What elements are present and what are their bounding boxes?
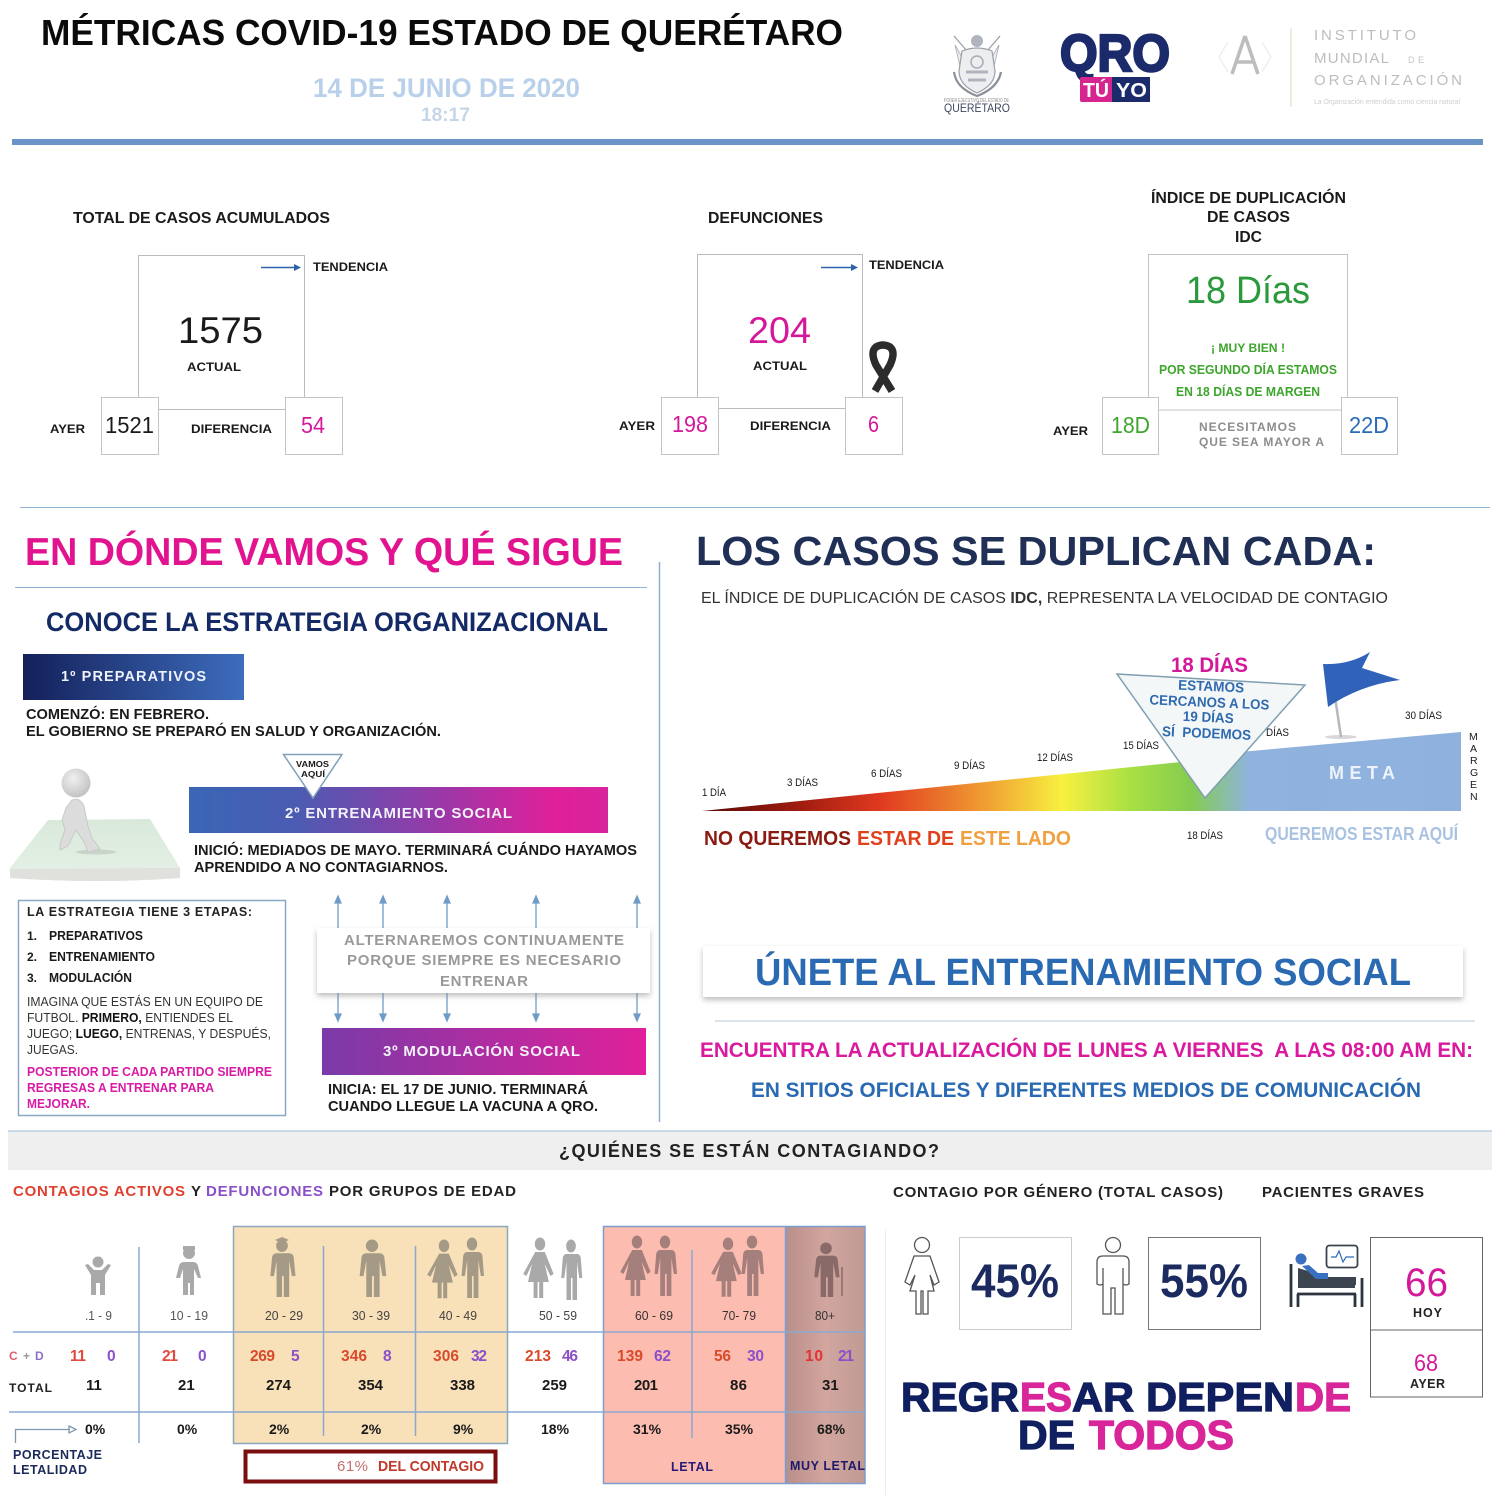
logo: Instituto Mundial de Organización: ORGANIZACIÓN [1314,72,1462,89]
arrow: porcentaje [16,1426,76,1443]
panel: total de casos: 1575 [178,310,263,351]
box: tres etapas: PREPARATIVOS [49,929,143,943]
caption: no queremos [704,828,1071,850]
chart: escala de días: 18 DÍAS [1187,829,1223,842]
panel: defunciones: AYER [619,419,655,433]
title: MÉTRICAS COVID-19 ESTADO DE QUERÉTARO [41,12,843,53]
row: contagios y defunciones: 139 [617,1348,643,1365]
panel: índice de duplicación: 18 Días [1186,270,1310,312]
panel: mujeres: 45% [971,1254,1059,1307]
panel: defunciones [619,210,944,454]
chart: escala de días: 3 DÍAS [787,776,818,789]
logo: QRO Tú y Yo: YO [1116,80,1147,102]
row: contagios y defunciones: 269 [250,1348,275,1365]
row: letalidad: 35% [725,1421,754,1437]
row: icons [85,1236,842,1300]
logo: Instituto Mundial de Organización: MUNDIAL [1314,50,1389,67]
row: total [9,1377,839,1395]
panel: índice de duplicación: QUE SEA MAYOR A [1199,435,1324,449]
panel: defunciones: 6 [868,411,879,437]
box: tres etapas: LA ESTRATEGIA TIENE 3 ETAPAS: [27,905,252,919]
panel: defunciones: 204 [748,310,811,351]
row: letalidad: 18% [541,1421,570,1437]
caption: no queremos: ESTE LADO [960,828,1071,850]
chart: escala de días: META [1329,763,1395,783]
logo: Instituto Mundial de Organización: INSTITUTO [1314,27,1416,44]
heading: TOTAL DE CASOS ACUMULADOS [73,210,330,227]
margen label [1469,731,1478,803]
row: age labels: 10 - 19 [170,1308,208,1323]
marker: 18 días: ESTAMOS [1178,677,1244,696]
box: tres etapas: MODULACIÓN [49,970,132,985]
row: age labels: 60 - 69 [635,1308,673,1323]
box: tres etapas: IMAGINA QUE ESTÁS EN UN EQUIPO DE [27,994,263,1009]
chart: escala de días: 1 DÍA [702,786,727,799]
caption: no queremos: ESTAR DE [857,828,954,850]
row: contagios y defunciones: C [9,1349,18,1363]
row: contagios y defunciones: 30 [747,1348,764,1365]
callout: alternaremos: ALTERNAREMOS CONTINUAMENTE [344,932,624,949]
stage 1 text: COMENZÓ: EN FEBRERO. [26,705,209,723]
time: 18:17 [421,105,470,126]
row: age labels: 80+ [815,1308,835,1323]
arrows: alternancia [335,896,640,1021]
chart: escala de días: 6 DÍAS [871,767,902,780]
stage 2 marker: AQUÍ [301,769,326,779]
row: total: 259 [542,1377,567,1394]
margen label: G [1470,767,1478,779]
row: contagios y defunciones: 21 [162,1348,178,1365]
row: age labels: 30 - 39 [352,1308,390,1323]
panel: índice de duplicación: 22D [1349,412,1389,438]
label: porcentaje letalidad: PORCENTAJE [13,1448,102,1462]
row: contagios y defunciones: + [23,1349,30,1363]
panel: pacientes graves [1370,1238,1482,1397]
heading: grupos de edad: DEFUNCIONES [206,1183,323,1200]
logo: Instituto Mundial de Organización: La Organización entendida como ciencia natural [1314,99,1460,106]
panel: defunciones: ACTUAL [753,359,807,373]
stage 2 bar [189,787,608,833]
stage 3 bar: 3º MODULACIÓN SOCIAL [383,1042,580,1060]
box: tres etapas: JUEGO; LUEGO, ENTRENAS, Y DESPUÉS, [27,1026,271,1041]
panel: defunciones: TENDENCIA [869,258,944,272]
callout: alternaremos [317,928,650,993]
stage 2 bar: 2º ENTRENAMIENTO SOCIAL [285,805,512,822]
row: contagios y defunciones: 306 [433,1348,459,1365]
box: tres etapas: ENTRENAMIENTO [49,950,155,964]
heading: IDC [1235,229,1262,246]
heading: en dónde vamos: EN DÓNDE VAMOS Y QUÉ SIGUE [25,530,623,574]
row: letalidad [85,1421,846,1437]
date: 14 DE JUNIO DE 2020 [313,73,580,103]
stage 1 text [26,705,441,740]
callout: 61% del contagio: 61% [337,1458,368,1475]
panel: total de casos: ACTUAL [187,360,241,374]
panel: total de casos [50,210,388,454]
margen label: N [1470,791,1478,803]
heading: género: CONTAGIO POR GÉNERO (TOTAL CASOS) [893,1184,1223,1201]
panel: total de casos: TENDENCIA [313,260,388,274]
panel: índice de duplicación: ¡ MUY BIEN ! [1211,341,1285,355]
row: total: 201 [634,1377,658,1394]
row: contagios y defunciones: 10 [805,1348,823,1365]
box: tres etapas: 1. [27,929,37,943]
stage 2 text: APRENDIDO A NO CONTAGIARNOS. [194,859,448,876]
row: letalidad: 0% [85,1421,106,1437]
row: total: 354 [358,1377,384,1394]
row: contagios y defunciones: D [35,1349,44,1363]
slogan: DE [1295,1374,1351,1420]
icon: black ribbon [873,345,893,391]
heading: DE CASOS [1207,209,1290,226]
band: quiénes se contagian: ¿QUIÉNES SE ESTÁN CONTAGIANDO? [559,1140,939,1161]
logo: Querétaro [944,35,1010,115]
row: contagios y defunciones: 5 [291,1348,300,1365]
row: total: 274 [266,1377,292,1394]
panel: total de casos: DIFERENCIA [191,422,272,436]
heading: ÍNDICE DE DUPLICACIÓN [1151,188,1346,207]
text: actualización: ENCUENTRA LA ACTUALIZACIÓN DE LUNES A VIERNES A LAS 08:00 AM EN: [700,1038,1473,1062]
box: tres etapas: REGRESAS A ENTRENAR PARA [27,1081,214,1095]
stage 2 marker [284,754,342,798]
panel: pacientes graves: 66 [1405,1261,1448,1305]
panel: defunciones: DIFERENCIA [750,419,831,433]
row: contagios y defunciones: 346 [341,1348,367,1365]
callout: alternaremos: PORQUE SIEMPRE ES NECESARIO [347,952,621,969]
slogan: REGR [901,1374,1019,1420]
stage 1 text: EL GOBIERNO SE PREPARÓ EN SALUD Y ORGANIZACIÓN. [26,722,441,740]
row: letalidad: 0% [177,1421,198,1437]
stage 3 text: INICIA: EL 17 DE JUNIO. TERMINARÁ [328,1081,588,1098]
panel: índice de duplicación: POR SEGUNDO DÍA ESTAMOS [1159,362,1337,377]
heading: CONOCE LA ESTRATEGIA ORGANIZACIONAL [46,607,608,637]
row: age labels [85,1308,835,1323]
box: tres etapas: POSTERIOR DE CADA PARTIDO SIEMPRE [27,1065,272,1079]
row: age labels: 40 - 49 [439,1308,477,1323]
heading: grupos de edad: Y [191,1183,201,1200]
text: sitios oficiales: EN SITIOS OFICIALES Y DIFERENTES MEDIOS DE COMUNICACIÓN [751,1078,1421,1102]
icon: patient in bed [1291,1246,1362,1307]
row: age labels: .1 - 9 [85,1308,112,1323]
banner: únete: ÚNETE AL ENTRENAMIENTO SOCIAL [755,950,1411,994]
icon: flag [1323,652,1400,739]
marker: 18 días: SÍ PODEMOS [1162,723,1251,743]
stage 3 bar [322,1028,646,1075]
row: contagios y defunciones: 21 [838,1348,854,1365]
chart: escala de días: 12 DÍAS [1037,751,1073,764]
heading: grupos de edad: POR GRUPOS DE EDAD [329,1183,516,1200]
margen label: R [1470,755,1478,767]
panel: hombres: 55% [1160,1254,1248,1307]
panel: estrategia organizacional [10,607,650,1116]
stage 3 text [328,1081,598,1115]
row: contagios y defunciones: 213 [525,1348,551,1365]
chart: escala de días: DÍAS [1266,726,1289,739]
stage 2 text [194,841,637,876]
panel: total de casos: 54 [301,412,325,438]
band: quiénes se contagian [8,1131,1492,1170]
icon: woman outline [905,1238,939,1314]
table: grupos de edad [9,1226,865,1484]
slogan: DE [1018,1412,1075,1458]
chart: escala de días: 30 DÍAS [1405,709,1442,722]
panel: defunciones: 198 [672,411,708,437]
box: tres etapas: FUTBOL. PRIMERO, ENTIENDES EL [27,1010,233,1025]
marker: 18 días: 19 DÍAS [1182,708,1234,726]
panel: hombres [1097,1238,1260,1330]
panel: índice de duplicación: AYER [1053,424,1088,438]
label: muy letal: MUY LETAL [790,1459,865,1473]
panel: pacientes graves: HOY [1413,1306,1443,1320]
box: tres etapas: 3. [27,971,37,985]
callout: 61% del contagio [246,1452,496,1482]
margen label: M [1469,731,1478,743]
row: letalidad: 9% [453,1421,474,1437]
row: contagios y defunciones: 11 [70,1348,86,1365]
label: porcentaje letalidad: LETALIDAD [13,1463,87,1477]
panel: pacientes graves: 68 [1414,1350,1438,1377]
panel: total de casos: AYER [50,422,85,436]
row: letalidad: 2% [269,1421,290,1437]
marker: 18 días: 18 DÍAS [1171,654,1248,677]
row: letalidad: 31% [633,1421,662,1437]
chart: escala de días: 9 DÍAS [954,759,985,772]
margen label: A [1470,743,1477,755]
row: age labels: 20 - 29 [265,1308,303,1323]
label: letal: LETAL [671,1460,713,1474]
slogan [901,1374,1351,1458]
callout: alternaremos: ENTRENAR [440,973,528,990]
row: contagios y defunciones: 62 [654,1348,671,1365]
heading: los casos se duplican: LOS CASOS SE DUPLICAN CADA: [696,528,1376,574]
row: contagios y defunciones: 0 [107,1348,116,1365]
row: contagios y defunciones: 56 [714,1348,731,1365]
box: tres etapas: 2. [27,950,37,964]
stage 2 marker: VAMOS [296,759,329,769]
row: total: 31 [822,1377,839,1394]
row: contagios y defunciones: 0 [198,1348,207,1365]
row: total: TOTAL [9,1381,52,1395]
row: total: 11 [86,1377,102,1394]
panel: mujeres [905,1238,1072,1330]
chart: escala de días: 15 DÍAS [1123,739,1159,752]
logo: Instituto Mundial de Organización [1219,27,1462,107]
stage 3 text: CUANDO LLEGUE LA VACUNA A QRO. [328,1098,598,1115]
row: total: 338 [450,1377,475,1394]
panel: índice de duplicación: 18D [1111,412,1150,438]
logo: QRO Tú y Yo: QRO [1060,25,1170,83]
slogan: ES [1020,1374,1072,1420]
row: age labels: 70- 79 [722,1308,756,1323]
row: letalidad: 68% [817,1421,846,1437]
row: contagios y defunciones: 8 [383,1348,392,1365]
row: total: 21 [178,1377,195,1394]
heading: grupos de edad: CONTAGIOS ACTIVOS [13,1183,185,1200]
stage 2 text: INICIÓ: MEDIADOS DE MAYO. TERMINARÁ CUÁNDO HAYAMOS [194,841,637,859]
heading: DEFUNCIONES [708,210,823,227]
heading [1151,188,1346,246]
panel: índice de duplicación [1053,188,1398,454]
chart: escala de días [702,652,1478,850]
row: total: 86 [730,1377,747,1394]
box: tres etapas [18,900,286,1116]
marker: 18 días: CERCANOS A LOS [1149,691,1270,713]
logo: QRO Tú y Yo: TÚ [1083,78,1109,102]
box: tres etapas: MEJORAR. [27,1097,90,1111]
panel: índice de duplicación: NECESITAMOS [1199,420,1296,434]
marker: 18 días [1117,654,1305,798]
heading: grupos de edad [13,1183,516,1200]
panel: pacientes graves: AYER [1410,1377,1445,1391]
label: porcentaje letalidad [13,1448,102,1477]
row: letalidad: 2% [361,1421,382,1437]
slogan: AR DEPEN [1072,1374,1294,1420]
row: age labels: 50 - 59 [539,1308,577,1323]
row: contagios y defunciones [9,1348,854,1365]
figure on field [10,768,180,881]
panel: total de casos: 1521 [105,412,154,438]
row: contagios y defunciones: 46 [562,1348,578,1365]
margen label: E [1470,779,1477,791]
slogan: TODOS [1089,1412,1234,1458]
logo: Querétaro: PODER EJECUTIVO DEL ESTADO DE [944,98,1009,104]
panel: índice de duplicación: EN 18 DÍAS DE MARGEN [1176,384,1320,399]
icon: man outline [1097,1238,1129,1314]
heading: pacientes graves: PACIENTES GRAVES [1262,1184,1424,1201]
stage 1 bar [23,654,244,700]
box: tres etapas: JUEGAS. [27,1042,78,1057]
stage 1 bar: 1º PREPARATIVOS [61,669,206,685]
logo: Querétaro: QUERÉTARO [944,100,1010,115]
logo: Instituto Mundial de Organización: DE [1408,55,1424,65]
text: definición IDC: EL ÍNDICE DE DUPLICACIÓN DE CASOS IDC, REPRESENTA LA VELOCIDAD DE CONTAGIO [701,588,1388,607]
callout: 61% del contagio: DEL CONTAGIO [378,1458,484,1475]
caption: no queremos: NO QUEREMOS [704,828,851,850]
row: contagios y defunciones: 32 [471,1348,487,1365]
caption: queremos estar aquí: QUEREMOS ESTAR AQUÍ [1265,823,1459,844]
